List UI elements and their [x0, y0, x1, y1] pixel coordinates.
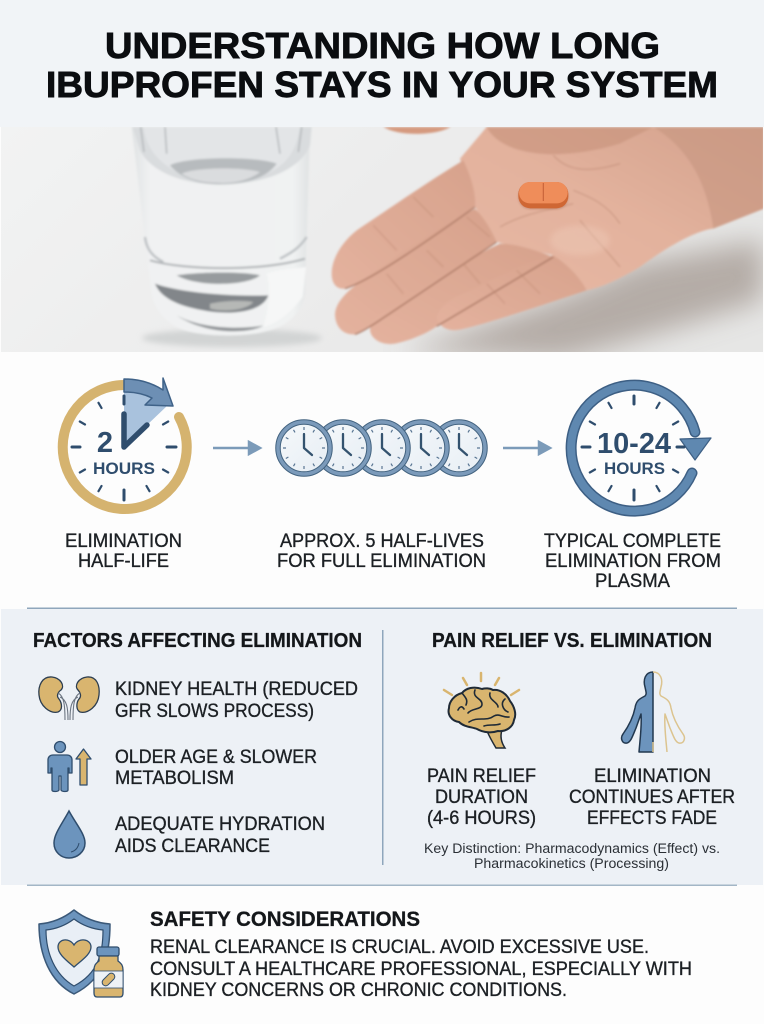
text: pain relief duration: [427, 766, 536, 829]
text: kidney health: [115, 679, 358, 722]
text: elimination continues: [569, 766, 735, 829]
heading: safety considerations: SAFETY CONSIDERATIONS: [150, 908, 420, 931]
label: typical complete elimination: PLASMA: [595, 571, 670, 592]
text: safety guidance: [150, 937, 692, 1001]
pill: [518, 182, 568, 209]
label: five half-lives: FOR FULL ELIMINATION: [277, 551, 486, 572]
hand: [332, 127, 764, 344]
icon: half-filled body: [622, 672, 684, 752]
text: elimination continues: CONTINUES AFTER: [569, 787, 735, 808]
label: typical complete elimination: [544, 531, 721, 592]
icon: water drop: [54, 811, 85, 858]
stat: 10-24 hours clock: 10-24: [597, 428, 671, 460]
icon: brain with rays: [444, 673, 519, 748]
header band with title: IBUPROFEN STAYS IN YOUR SYSTEM: [46, 64, 718, 105]
arrow: five half-lives to complete elimination: [503, 442, 550, 454]
icon: shield with heart and medicine bottle: [39, 910, 123, 997]
icon: person with upward arrow: [48, 742, 91, 792]
header band with title: [0, 0, 764, 127]
label: elimination half-life: ELIMINATION: [65, 531, 182, 552]
text: hydration: [115, 814, 325, 857]
label: typical complete elimination: ELIMINATION FROM: [545, 551, 721, 572]
shadow under hand: [400, 240, 764, 360]
text: pain relief duration: PAIN RELIEF: [427, 766, 536, 787]
stat: 10-24 hours clock: [571, 385, 711, 511]
text: safety guidance: CONSULT A HEALTHCARE PROFESSIONAL, ESPECIALLY WITH: [150, 959, 692, 980]
panel: factors and pain relief band: [1, 608, 763, 886]
heading: factors affecting elimination: FACTORS AFFECTING ELIMINATION: [33, 630, 362, 652]
text: key distinction: [424, 841, 720, 871]
text: older age: METABOLISM: [115, 768, 234, 789]
text: safety guidance: KIDNEY CONCERNS OR CHRONIC CONDITIONS.: [150, 980, 567, 1001]
text: pain relief duration: DURATION: [435, 787, 528, 808]
text: older age: [115, 747, 317, 789]
stat: elimination half-life clock: HOURS: [93, 459, 155, 478]
heading: pain relief vs elimination: PAIN RELIEF VS. ELIMINATION: [432, 630, 712, 652]
stat: elimination half-life clock: [63, 378, 187, 509]
five overlapping clocks: [278, 422, 485, 474]
text: kidney health: KIDNEY HEALTH (REDUCED: [115, 679, 358, 700]
label: five half-lives: [277, 531, 486, 572]
text: key distinction: Pharmacokinetics (Processing): [474, 856, 669, 871]
text: key distinction: Key Distinction: Pharmacodynamics (Effect) vs.: [424, 841, 720, 856]
arrow: half-life to five half-lives: [213, 442, 260, 454]
stat: 10-24 hours clock: HOURS: [604, 459, 665, 478]
icon: kidneys: [39, 677, 99, 720]
glass of water: [132, 127, 312, 336]
label: typical complete elimination: TYPICAL COMPLETE: [544, 531, 721, 552]
text: kidney health: GFR SLOWS PROCESS): [115, 701, 314, 722]
text: elimination continues: ELIMINATION: [594, 766, 711, 787]
text: hydration: AIDS CLEARANCE: [115, 836, 270, 857]
text: older age: OLDER AGE & SLOWER: [115, 747, 317, 768]
text: safety guidance: RENAL CLEARANCE IS CRUCIAL. AVOID EXCESSIVE USE.: [150, 937, 649, 958]
label: elimination half-life: [65, 531, 182, 572]
label: elimination half-life: HALF-LIFE: [78, 551, 169, 572]
photo: hand holding a pill beside a glass of water: [1, 127, 764, 360]
header band with title: UNDERSTANDING HOW LONG: [105, 25, 660, 66]
stat: elimination half-life clock: 2: [97, 427, 113, 459]
label: five half-lives: APPROX. 5 HALF-LIVES: [280, 531, 484, 552]
text: elimination continues: EFFECTS FADE: [587, 808, 717, 829]
text: hydration: ADEQUATE HYDRATION: [115, 814, 325, 835]
text: pain relief duration: (4-6 HOURS): [427, 808, 536, 829]
